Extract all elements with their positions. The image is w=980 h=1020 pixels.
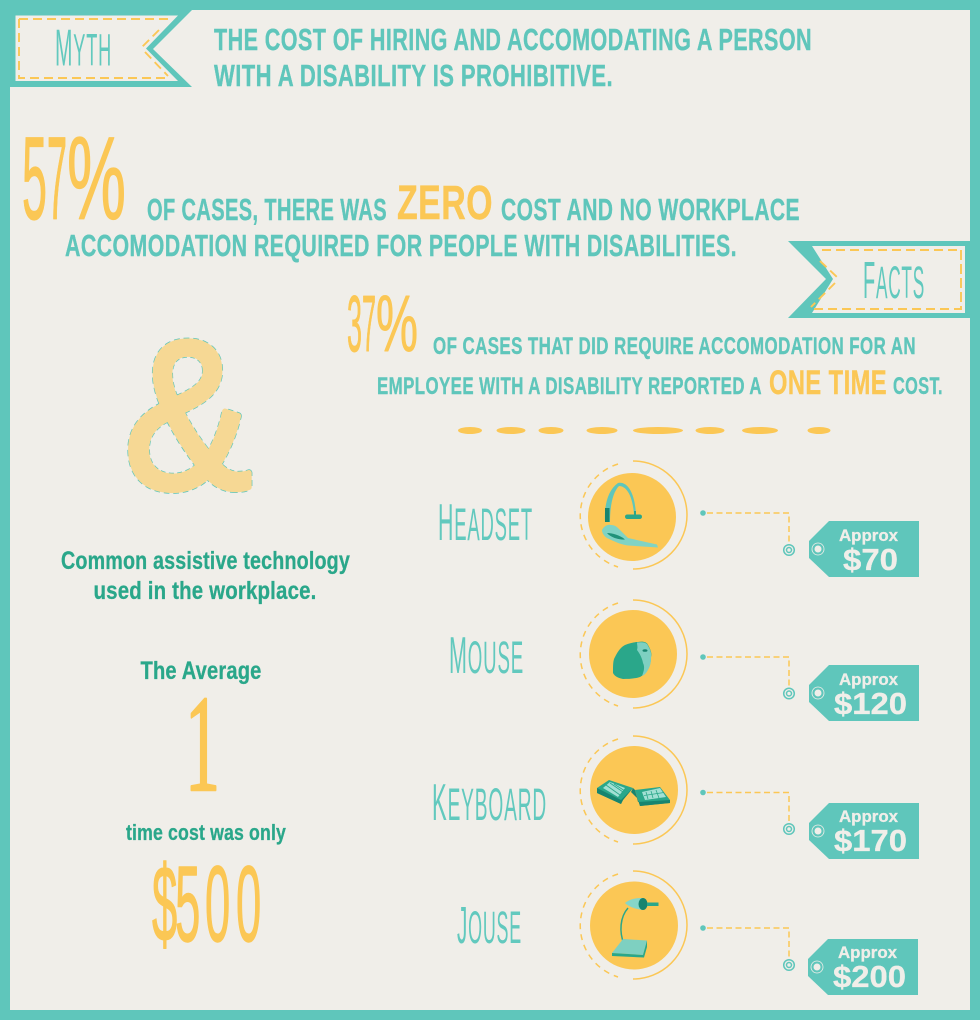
assistive technology text: used in the workplace. xyxy=(94,577,316,605)
fact: 37 percent xyxy=(347,279,943,402)
price tag: 120 dollars xyxy=(809,665,919,721)
price tag: 170 dollars: Approx xyxy=(839,807,899,826)
icon: headset xyxy=(602,483,658,548)
divider xyxy=(458,427,830,434)
row: headset xyxy=(438,461,919,577)
icon: mouse xyxy=(613,642,651,679)
connector xyxy=(700,790,794,834)
average one time cost: The Average xyxy=(140,657,262,685)
row: jouse xyxy=(457,871,918,995)
fact: 37 percent: EMPLOYEE WITH A DISABILITY REPORTED A xyxy=(377,373,762,400)
500 dollars figure: $500 xyxy=(152,843,261,964)
myth statement heading: WITH A DISABILITY IS PROHIBITIVE. xyxy=(214,58,613,93)
mouse circle xyxy=(580,600,687,708)
37 percent figure: 7 xyxy=(362,279,376,368)
assistive technology text xyxy=(61,547,350,605)
ampersand: & xyxy=(124,296,252,533)
jouse circle xyxy=(580,871,687,979)
fact: 57 percent: OF CASES, THERE WAS xyxy=(147,192,387,227)
57 percent figure: 7 xyxy=(47,113,67,245)
average one time cost xyxy=(126,657,286,964)
number one: 1 xyxy=(185,667,220,820)
row: keyboard: KEYBOARD xyxy=(432,774,547,832)
connector xyxy=(700,654,794,699)
price tag: 200 dollars xyxy=(808,939,918,995)
price tag: 200 dollars: Approx xyxy=(838,943,898,962)
row: jouse: JOUSE xyxy=(457,897,522,955)
myth banner xyxy=(0,0,192,87)
price tag: 70 dollars: Approx xyxy=(839,526,899,545)
row: headset: HEADSET xyxy=(438,494,533,552)
price tag: 70 dollars xyxy=(809,521,919,577)
average one time cost: time cost was only xyxy=(126,820,286,845)
connector xyxy=(700,510,794,555)
fact: 57 percent xyxy=(22,113,800,263)
price tag: 170 dollars xyxy=(809,803,919,859)
headset circle xyxy=(580,461,687,569)
assistive technology text: Common assistive technology xyxy=(61,547,350,575)
myth banner: MYTH xyxy=(55,20,112,78)
37 percent figure: % xyxy=(376,279,418,368)
myth statement heading xyxy=(214,22,812,93)
57 percent figure: 5 xyxy=(22,113,47,245)
fact: 37 percent: ONE TIME xyxy=(769,364,887,402)
row: keyboard xyxy=(432,736,919,859)
price tag: 170 dollars: $170 xyxy=(834,823,907,858)
price tag: 200 dollars: $200 xyxy=(833,959,906,994)
57 percent figure xyxy=(22,113,126,245)
37 percent figure xyxy=(347,279,418,368)
fact: 57 percent: COST AND NO WORKPLACE xyxy=(501,192,800,227)
row: mouse: MOUSE xyxy=(449,627,524,685)
57 percent figure: % xyxy=(67,113,126,245)
keyboard circle xyxy=(580,736,687,844)
row: mouse xyxy=(449,600,919,721)
price tag: 120 dollars: Approx xyxy=(839,670,899,689)
price tag: 120 dollars: $120 xyxy=(834,686,907,721)
facts banner xyxy=(788,241,980,318)
fact: 57 percent: ZERO xyxy=(397,177,493,230)
fact: 37 percent: COST. xyxy=(893,373,943,400)
price tag: 70 dollars: $70 xyxy=(843,542,898,577)
icon: keyboard xyxy=(597,780,670,806)
connector xyxy=(700,925,794,970)
ampersand: & xyxy=(124,296,252,533)
icon: jouse stand xyxy=(612,898,658,958)
37 percent figure: 3 xyxy=(347,279,362,368)
